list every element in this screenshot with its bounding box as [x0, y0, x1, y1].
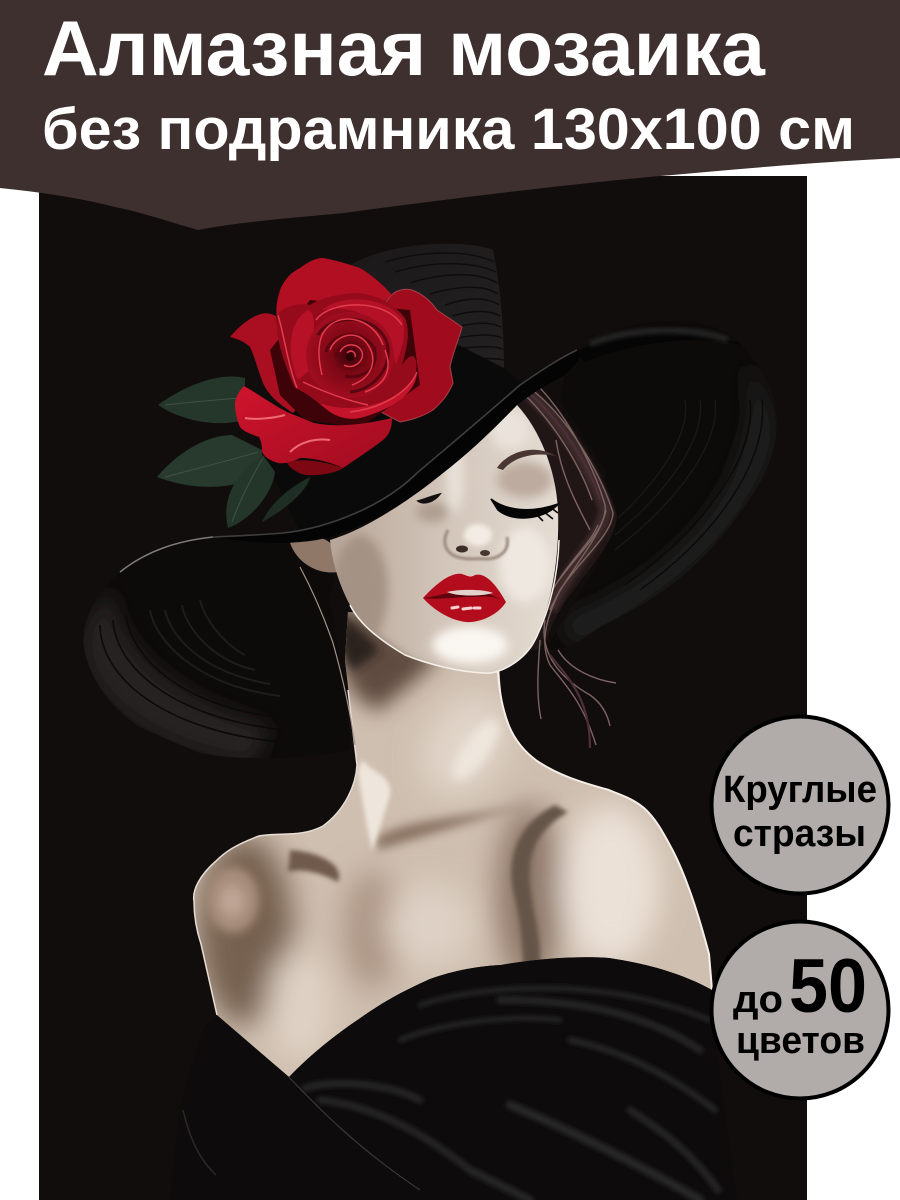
banner	[0, 0, 900, 230]
rose right petal	[320, 289, 462, 422]
body: neck, shoulders and chest	[192, 612, 713, 1077]
hat brim: right side	[564, 327, 776, 642]
chin highlight	[432, 626, 508, 664]
hat brim: left side	[83, 536, 280, 758]
rose left petal	[230, 313, 305, 413]
artwork background	[39, 176, 807, 1200]
face	[330, 405, 559, 680]
badge: round rhinestones: Круглые	[723, 769, 877, 811]
rose inner whorl	[277, 293, 416, 416]
subtitle: без подрамника 130х100 см	[42, 97, 855, 162]
eyebrow	[497, 450, 556, 470]
right brim top rim	[575, 331, 742, 362]
green leaves	[157, 377, 310, 528]
title: Алмазная мозаика	[42, 4, 766, 92]
badge: up to 50 colours: до	[733, 979, 783, 1021]
hat crown	[340, 244, 504, 430]
badge: up to 50 colours: цветов	[736, 1020, 865, 1062]
hat top surface	[260, 290, 525, 533]
artwork: woman in black hat with red rose	[39, 176, 807, 1200]
left closed eye	[418, 494, 440, 503]
rose shadow core	[270, 300, 420, 428]
body rim light	[194, 690, 357, 1015]
brim rim highlight	[120, 537, 213, 572]
nose	[445, 524, 507, 559]
badge: up to 50 colours: 50	[789, 944, 867, 1029]
red lips	[423, 574, 506, 622]
badge: round rhinestones: стразы	[733, 813, 866, 855]
hair	[517, 388, 617, 748]
rose top petal	[276, 258, 392, 340]
right closed eye	[491, 499, 558, 521]
sternum highlight	[358, 760, 390, 852]
hat front band	[213, 350, 579, 543]
ear and neck line	[290, 537, 355, 745]
badge: up to 50 colours	[712, 922, 888, 1098]
rose bottom petal	[235, 386, 392, 468]
shoulder crease	[511, 805, 568, 968]
red rose	[230, 258, 462, 475]
dress	[170, 957, 737, 1200]
badge: round rhinestones	[712, 716, 888, 894]
